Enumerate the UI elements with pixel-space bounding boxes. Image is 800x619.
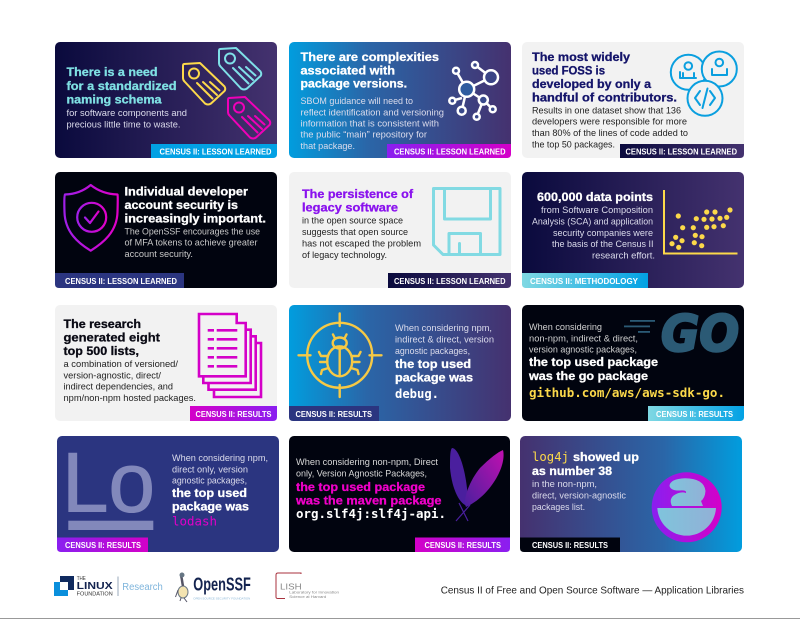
label: results: CENSUS II: RESULTS — [65, 541, 141, 550]
label: results: CENSUS II: RESULTS — [196, 410, 272, 419]
label: lesson learned — [388, 273, 511, 288]
panel: lodash package — [57, 436, 279, 552]
text: top 500 lists body: indirect dependencies, and — [64, 382, 173, 392]
heading: contributors: used FOSS is — [532, 64, 605, 78]
heading: legacy software: The persistence of — [302, 187, 414, 201]
label: results — [190, 406, 277, 421]
text: complexities body: that package. — [300, 141, 355, 151]
heading: legacy software — [302, 187, 414, 214]
text: account security body: The OpenSSF encourages the use — [124, 226, 260, 236]
chart: scatter plot — [664, 190, 738, 254]
icon: shield with check — [64, 185, 118, 251]
logo: Linux Foundation Research: FOUNDATION — [77, 592, 113, 598]
icon: network graph — [449, 62, 498, 120]
label: methodology — [522, 273, 648, 288]
heading: complexities — [300, 50, 439, 90]
text: top 500 lists body: version-agnostic, direct/ — [64, 370, 161, 380]
text: contributors body — [532, 106, 688, 150]
text: legacy software body: has not escaped the problem — [302, 238, 421, 248]
text: log4j body — [532, 479, 626, 512]
logo: LISH: Science at Harvard — [289, 595, 326, 599]
label: lesson learned: CENSUS II: LESSON LEARNED — [65, 277, 177, 286]
heading: contributors: handful of contributors. — [532, 90, 677, 104]
icon: magenta tag — [228, 97, 270, 138]
text: maven intro — [296, 457, 438, 478]
heading: debug result: package was — [395, 370, 473, 384]
text: maven package name: org.slf4j:slf4j-api. — [296, 506, 446, 521]
icon: OpenSSF goose — [176, 572, 188, 602]
label: results: CENSUS II: RESULTS — [656, 410, 733, 419]
panel: handful of contributors — [522, 42, 744, 158]
text: contributors body: than 80% of the lines of code added to — [532, 128, 688, 138]
text: complexities body — [300, 96, 444, 151]
heading: legacy software: legacy software — [302, 200, 398, 214]
logo: Linux Foundation Research: LINUX — [77, 581, 113, 592]
text: debug intro — [395, 323, 494, 356]
label: lesson learned: CENSUS II: LESSON LEARNED — [626, 148, 737, 156]
icon: lodash logo: Lo — [62, 436, 155, 530]
icon: contributors circles — [671, 52, 737, 116]
label: results: CENSUS II: RESULTS — [532, 541, 608, 550]
heading: data points: 600,000 data points — [537, 190, 653, 204]
text: legacy software body: in the open source space — [302, 216, 403, 226]
text: go intro: When considering — [529, 322, 602, 332]
text: lodash intro — [172, 453, 268, 486]
logo: Linux Foundation Research — [54, 576, 163, 598]
heading: contributors: The most widely — [532, 50, 630, 64]
text: debug intro: agnostic packages, — [395, 346, 470, 356]
label: lesson learned: CENSUS II: LESSON LEARNED — [394, 277, 506, 286]
heading: log4j rank: as number 38 — [532, 464, 612, 478]
icon: cyan tag — [219, 48, 261, 90]
text: data points body: from Software Composition — [541, 205, 653, 215]
logo: LISH: Laboratory for Innovation — [289, 590, 339, 594]
heading: maven result: the top used package — [296, 480, 425, 494]
label: results — [57, 538, 148, 552]
heading: debug result: the top used — [395, 357, 471, 371]
text: naming schema body: for software components and — [66, 108, 187, 118]
label: lesson learned — [387, 144, 511, 158]
logo: Linux Foundation Research: THE — [77, 576, 86, 582]
label: lesson learned — [151, 144, 277, 158]
heading: top 500 lists — [64, 317, 160, 358]
heading: log4j rank — [532, 449, 639, 478]
panel: eight top 500 lists — [55, 305, 277, 421]
icon: go logo — [624, 305, 739, 363]
heading: debug result — [395, 357, 473, 401]
text: debug intro: indirect & direct, version — [395, 334, 494, 344]
text: debug intro: When considering npm, — [395, 323, 492, 333]
text: go intro: version agnostic packages, — [529, 344, 637, 354]
heading: lodash result: package was — [172, 500, 249, 514]
icon: yellow tag — [183, 63, 225, 104]
logo: LISH — [276, 573, 339, 599]
heading: account security: account security is — [124, 198, 238, 212]
label: results — [289, 406, 379, 421]
text: data points body: research effort. — [592, 250, 655, 260]
heading: account security — [124, 184, 266, 226]
text: go intro: non-npm, indirect & direct, — [529, 334, 638, 344]
panel: go package — [522, 305, 744, 421]
panel: developer account security — [55, 172, 277, 288]
label: methodology: CENSUS II: METHODOLOGY — [530, 277, 639, 286]
text: log4j body: direct, version-agnostic — [532, 490, 626, 500]
text: contributors body: Results in one dataset show that 136 — [532, 106, 681, 116]
panel: log4j — [520, 436, 742, 552]
text: data points body: Analysis (SCA) and application — [532, 216, 653, 226]
text: complexities body: information that is consistent with — [300, 118, 439, 128]
text: lodash intro: agnostic packages, — [172, 476, 247, 486]
text: data points body: the basis of the Census II — [552, 239, 654, 249]
heading: top 500 lists: generated eight — [64, 330, 160, 344]
text: lodash intro: direct only, version — [172, 464, 248, 474]
heading: lodash result: the top used — [172, 486, 247, 500]
heading: complexities: There are complexities — [300, 50, 439, 64]
heading: lodash result — [172, 486, 249, 514]
text: footer title: Census II of Free and Open Source Software — Application Libraries — [441, 584, 744, 596]
label: lesson learned — [620, 144, 744, 158]
panel: maven package — [289, 436, 510, 552]
icon: bug in crosshair — [298, 314, 382, 397]
logo: OpenSSF: OpenSSF — [193, 575, 251, 595]
label: lesson learned — [55, 273, 184, 288]
panel: standardized naming schema — [55, 42, 277, 158]
text: legacy software body: suggests that open source — [302, 227, 408, 237]
label: results: CENSUS II: RESULTS — [424, 541, 501, 550]
text: legacy software body: of legacy technology. — [302, 250, 387, 260]
icon: go logo: GO — [661, 305, 739, 363]
label: lesson learned: CENSUS II: LESSON LEARNED — [160, 148, 272, 156]
heading: account security: Individual developer — [124, 184, 248, 198]
text: contributors body: the top 50 packages. — [532, 140, 615, 150]
label: results: CENSUS II: RESULTS — [296, 410, 372, 419]
text: complexities body: SBOM guidance will need to — [300, 96, 413, 106]
heading: top 500 lists: top 500 lists, — [64, 344, 139, 358]
heading: complexities: associated with — [300, 64, 395, 78]
heading: log4j rank: log4j — [532, 449, 569, 464]
icon: apache feather — [450, 448, 504, 521]
logo: OpenSSF: OPEN SOURCE SECURITY FOUNDATION — [193, 596, 250, 600]
heading: naming schema: for a standardized — [66, 79, 176, 93]
panel: package version complexities — [289, 42, 511, 158]
label: results — [520, 538, 620, 552]
text: naming schema body: precious little time to waste. — [66, 120, 180, 130]
text: maven intro: only, Version Agnostic Packages, — [296, 468, 427, 478]
text: maven intro: When considering non-npm, Direct — [296, 457, 438, 467]
heading: account security: increasingly important. — [124, 212, 266, 226]
text: go package path: github.com/aws/aws-sdk-go. — [529, 385, 725, 400]
heading: maven result: was the maven package — [295, 494, 442, 508]
text: log4j body: in the non-npm, — [532, 479, 597, 489]
text: account security body — [124, 226, 260, 259]
text: top 500 lists body — [64, 359, 196, 403]
heading: complexities: package versions. — [300, 76, 407, 90]
heading: naming schema — [66, 65, 176, 106]
text: data points body: security companies were — [553, 228, 653, 238]
heading: contributors — [532, 50, 677, 104]
heading: go result: the top used package — [529, 355, 658, 369]
icon: log4j circle — [652, 472, 722, 542]
panel: 600,000 data points — [522, 172, 744, 288]
text: account security body: of MFA tokens to achieve greater — [124, 238, 258, 248]
text: go intro — [529, 322, 638, 354]
heading: top 500 lists: The research — [64, 317, 141, 331]
heading: contributors: developed by only a — [532, 77, 651, 91]
text: log4j body: packages list. — [532, 502, 585, 512]
text: complexities body: reflect identification and versioning — [300, 108, 444, 118]
text: data points body — [532, 205, 655, 260]
heading: naming schema: There is a need — [66, 65, 158, 79]
text: contributors body: developers were responsible for more — [532, 116, 687, 126]
heading: go result — [528, 355, 658, 383]
text: account security body: account security. — [124, 249, 193, 259]
heading: go result: was the go package — [528, 369, 648, 383]
text: legacy software body — [302, 216, 421, 260]
label: results — [415, 538, 510, 552]
logo: Linux Foundation Research: Research — [122, 582, 163, 593]
text: lodash name: lodash — [172, 514, 217, 528]
icon: stacked documents — [199, 314, 261, 397]
heading: log4j rank: showed up — [573, 450, 639, 464]
heading: debug result: debug. — [395, 386, 439, 401]
text: top 500 lists body: a combination of versioned/ — [64, 359, 178, 369]
panel: persistence of legacy software — [289, 172, 511, 288]
text: top 500 lists body: npm/non-npm hosted packages. — [64, 393, 196, 403]
label: lesson learned: CENSUS II: LESSON LEARNED — [394, 148, 506, 156]
text: complexities body: the public “main” repository for — [300, 130, 427, 140]
label: results — [648, 406, 744, 421]
heading: maven result — [295, 480, 442, 508]
icon: floppy disk — [434, 188, 500, 254]
logo: LISH: LISH — [280, 582, 302, 591]
text: naming schema body — [66, 108, 187, 130]
logo: OpenSSF — [176, 572, 251, 602]
text: lodash intro: When considering npm, — [172, 453, 268, 463]
panel: debug package — [289, 305, 511, 421]
heading: naming schema: naming schema — [66, 92, 162, 106]
